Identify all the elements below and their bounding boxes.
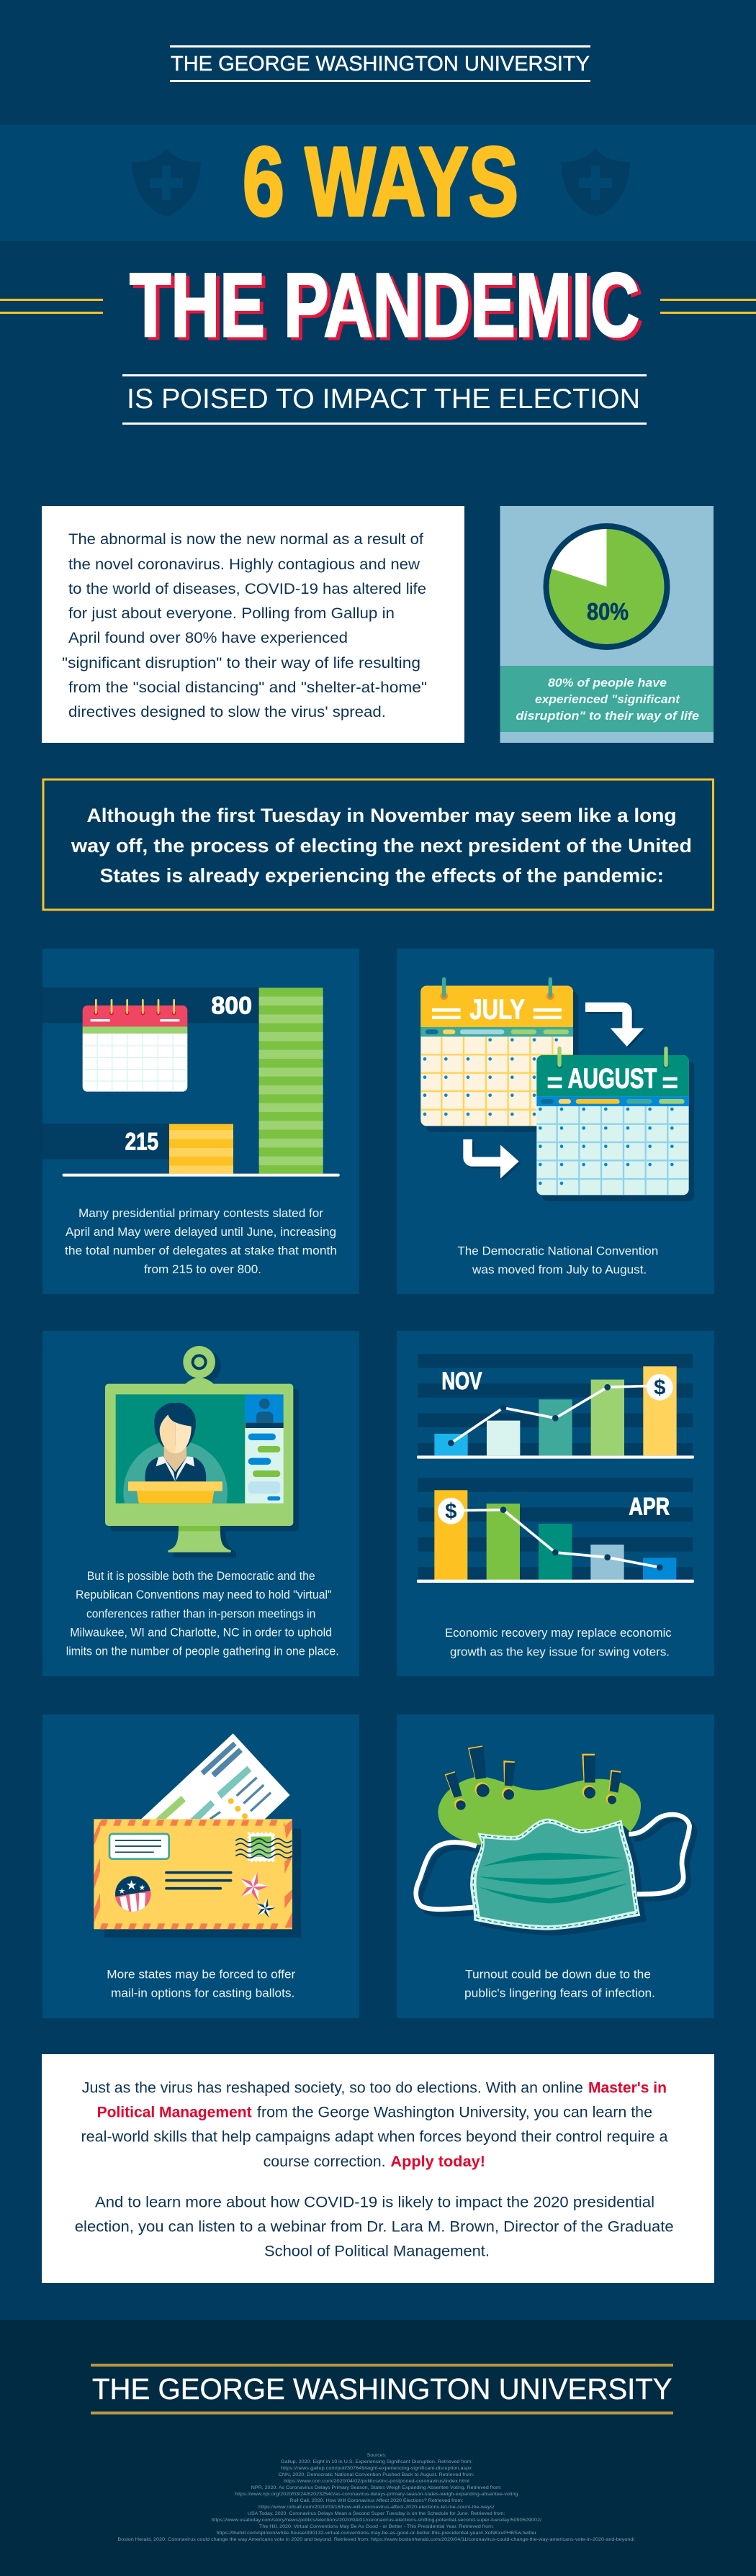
panel: intro text: April found over 80% have experienced xyxy=(68,629,348,646)
stat caption xyxy=(516,676,699,723)
caption xyxy=(445,1626,672,1658)
caption xyxy=(107,1968,296,1999)
title: 6 ways: 6 WAYS xyxy=(243,127,518,236)
panel: call to action: election, you can listen to a webinar from Dr. Lara M. Brown, Director of the Graduate xyxy=(75,2218,674,2236)
panel: turnout xyxy=(397,1714,714,2018)
panel: intro text: The abnormal is now the new normal as a result of xyxy=(68,530,423,548)
icon: august calendar: AUGUST xyxy=(568,1063,657,1094)
sources: Sources: xyxy=(367,2453,387,2458)
pie chart xyxy=(543,523,670,650)
sources: The Hill, 2020: Virtual Conventions May Be As Good - or Better - This Presidential Year. Retrieved from: xyxy=(259,2524,494,2529)
caption: More states may be forced to offer xyxy=(107,1968,296,1981)
panel: call to action: course correction. xyxy=(264,2153,386,2170)
footer university name: THE GEORGE WASHINGTON UNIVERSITY xyxy=(92,2372,672,2405)
panel: mail-in ballots xyxy=(42,1714,359,2018)
axis xyxy=(63,1174,340,1177)
sources: https://thehill.com/opinion/white-house/490132-virtual-conventions-may-be-as-good-or-better-this-presidential-year#.XoNKxvPHBSw.twitter xyxy=(216,2531,537,2536)
header: university name: THE GEORGE WASHINGTON UNIVERSITY xyxy=(171,53,590,76)
caption: the total number of delegates at stake that month xyxy=(65,1244,337,1257)
value 215: 215 xyxy=(125,1129,158,1156)
bar chart: nov: $ xyxy=(654,1375,665,1399)
value 800: 800 xyxy=(211,992,252,1019)
caption: The Democratic National Convention xyxy=(457,1244,658,1258)
icon: august calendar xyxy=(536,1047,694,1201)
caption: conferences rather than in-person meetings in xyxy=(86,1606,315,1621)
arrow: down xyxy=(585,1003,646,1049)
ear loops xyxy=(416,1815,690,1910)
chat sidebar xyxy=(245,1394,284,1504)
exclamation marks xyxy=(445,1745,621,1810)
caption: from 215 to over 800. xyxy=(144,1262,261,1276)
panel: intro text: to the world of diseases, COVID-19 has altered life xyxy=(68,580,426,597)
caption: Republican Conventions may need to hold "virtual" xyxy=(76,1588,332,1601)
caption: public's lingering fears of infection. xyxy=(464,1987,655,1999)
panel: intro text xyxy=(42,506,464,743)
header: university name xyxy=(170,45,590,82)
stat caption: disruption" to their way of life xyxy=(516,709,699,723)
caption: Many presidential primary contests slated for xyxy=(78,1206,323,1220)
panel: call to action: Just as the virus has reshaped society, so too do elections. With an online xyxy=(82,2079,583,2096)
caption: was moved from July to August. xyxy=(472,1262,647,1277)
panel: virtual conventions xyxy=(42,1331,359,1676)
caption: growth as the key issue for swing voters. xyxy=(450,1645,670,1658)
panel: intro text: "significant disruption" to their way of life resulting xyxy=(62,654,420,672)
icon: ballot xyxy=(140,1733,290,1820)
sources: CNN, 2020. Democratic National Convention Pushed Back to August. Retrieved from: xyxy=(279,2472,474,2477)
caption: Turnout could be down due to the xyxy=(465,1968,651,1981)
bar chart: nov xyxy=(417,1354,694,1459)
stat caption: experienced "significant xyxy=(535,692,680,706)
panel: intro text: the novel coronavirus. Highly contagious and new xyxy=(68,556,420,573)
shadows xyxy=(420,1820,695,1915)
icon: right shield xyxy=(561,148,630,217)
bar chart: delegates xyxy=(42,988,340,1177)
video screen: speaker xyxy=(115,1394,245,1504)
panel: intro text: directives designed to slow the virus' spread. xyxy=(68,703,386,720)
icon: video monitor xyxy=(105,1346,299,1558)
flag badge xyxy=(115,1876,151,1912)
panel: call to action: And to learn more about how COVID-19 is likely to impact the 2020 presidential xyxy=(95,2194,654,2211)
bar chart: apr: $ xyxy=(445,1499,456,1523)
arrow: right xyxy=(463,1139,521,1180)
sources xyxy=(117,2453,635,2542)
caption xyxy=(66,1569,339,1658)
green blob xyxy=(438,1776,641,1845)
sources: Boston Herald, 2020: Coronavirus could change the way Americans vote in 2020 and beyond. Retrieved from: https://www.bostonherald.com/2020/04/11/coronavirus-could-change-the-way-americans-vote-in-2020-and-beyond/ xyxy=(117,2537,635,2542)
caption: April and May were delayed until June, increasing xyxy=(66,1225,336,1239)
green bar 800 xyxy=(259,988,323,1174)
bar chart: apr xyxy=(417,1478,694,1583)
caption: Economic recovery may replace economic xyxy=(445,1626,672,1640)
sources: USA Today, 2020. Coronavirus Delays Mean a Second Super Tuesday is on the Schedule for June. Retrieved from: xyxy=(248,2511,505,2516)
lectern xyxy=(128,1481,222,1504)
panel: delegates xyxy=(42,949,359,1294)
caption: mail-in options for casting ballots. xyxy=(111,1987,294,1999)
caption xyxy=(464,1968,655,1999)
icon: left shield xyxy=(132,148,201,217)
sources: Roll Call, 2020. How Will Coronavirus Affect 2020 Elections? Retrieved from: xyxy=(289,2498,464,2503)
mask xyxy=(470,1819,640,1930)
address label xyxy=(109,1834,169,1859)
footer university name xyxy=(91,2364,673,2414)
panel: call to action: real-world skills that help campaigns adapt when forces beyond their control require a xyxy=(81,2128,668,2145)
caption: But it is possible both the Democratic and the xyxy=(87,1569,315,1583)
callout: gold box: Although the first Tuesday in November may seem like a long xyxy=(86,805,677,826)
icon: july calendar: JULY xyxy=(469,995,525,1026)
sources: Gallup, 2020. Eight in 10 in U.S. Experiencing Significant Disruption. Retrieved from: xyxy=(281,2459,473,2464)
sources: NPR, 2020. As Coronavirus Delays Primary Season, States Weigh Expanding Absentee Voting. Retrieved from: xyxy=(251,2485,502,2490)
bar chart: apr: APR xyxy=(629,1493,670,1520)
callout: gold box: way off, the process of electing the next president of the United xyxy=(71,835,692,857)
panel: call to action xyxy=(42,2054,714,2283)
panel: convention calendars xyxy=(397,949,714,1294)
callout: gold box: States is already experiencing the effects of the pandemic: xyxy=(100,865,664,887)
caption: Milwaukee, WI and Charlotte, NC in order to uphold xyxy=(70,1625,332,1640)
bar chart: nov: NOV xyxy=(441,1368,482,1395)
stat caption: 80% of people have xyxy=(548,676,667,690)
subtitle: IS POISED TO IMPACT THE ELECTION xyxy=(127,384,640,415)
caption: limits on the number of people gathering in one place. xyxy=(66,1644,339,1658)
icon: envelope xyxy=(94,1819,301,1938)
sources: https://www.npr.org/2020/03/24/820232540/as-coronavirus-delays-primary-season-states-weigh-expanding-absentee-voting xyxy=(235,2492,518,2497)
callout: gold box xyxy=(43,779,713,910)
sources: https://www.cnn.com/2020/04/02/politics/dnc-postponed-coronavirus/index.html xyxy=(284,2479,469,2484)
panel: call to action: Master's in xyxy=(588,2079,667,2096)
title band xyxy=(0,125,756,241)
icon: face mask with exclamation marks xyxy=(416,1745,695,1935)
caption xyxy=(457,1244,658,1277)
sources: https://www.rollcall.com/2020/03/16/how-will-coronavirus-affect-2020-elections-let-me-count-the-ways/ xyxy=(258,2505,495,2510)
panel: 80 percent stat xyxy=(500,506,714,743)
panel: intro text: from the "social distancing" and "shelter-at-home" xyxy=(68,679,427,696)
icon: july calendar xyxy=(420,977,578,1132)
panel: intro text: for just about everyone. Polling from Gallup in xyxy=(68,605,395,622)
panel: call to action: from the George Washington University, you can learn the xyxy=(257,2103,652,2120)
panel: call to action: School of Political Management. xyxy=(264,2243,490,2260)
sources: https://www.usatoday.com/story/news/politics/elections/2020/04/01/coronavirus-elections-shifting-potential-second-super-tuesday/5090509002/ xyxy=(212,2518,541,2523)
panel: economy xyxy=(397,1331,714,1676)
navy star xyxy=(253,1896,277,1919)
pink star xyxy=(235,1868,272,1903)
icon: calendar xyxy=(83,1000,187,1092)
caption xyxy=(65,1206,337,1276)
sources: https://news.gallup.com/poll/307649/eight-experiencing-significant-disruption.aspx xyxy=(281,2466,472,2471)
person xyxy=(145,1403,206,1481)
yellow bar 215 xyxy=(169,1124,233,1174)
footer xyxy=(0,2320,756,2576)
pie chart: 80% xyxy=(587,598,629,625)
subtitle xyxy=(122,374,647,425)
panel: call to action: Political Management xyxy=(97,2103,252,2120)
panel: call to action: Apply today! xyxy=(390,2153,485,2170)
stamp xyxy=(235,1834,292,1861)
